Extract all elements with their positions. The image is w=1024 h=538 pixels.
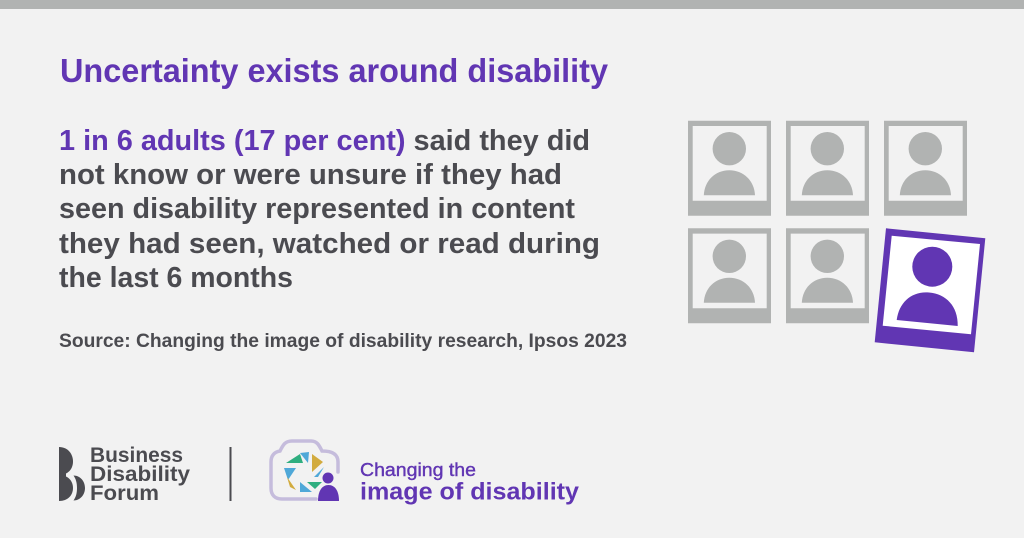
logo text: Changing the	[360, 460, 476, 480]
statistic text block: 1 in 6 adults (17 per cent) said they did	[59, 125, 590, 157]
logo mark	[59, 447, 85, 501]
camera outline icon	[271, 441, 338, 499]
highlighted purple photo	[875, 228, 985, 352]
Business Disability Forum logo	[59, 444, 190, 505]
statistic text block: not know or were unsure if they had	[59, 159, 562, 191]
statistic text block: seen disability represented in content	[59, 193, 575, 225]
top grey band	[0, 0, 1024, 9]
Changing the image of disability logo	[271, 441, 579, 506]
Changing the image of disability logo: image of disability	[360, 478, 579, 506]
statistic text block	[59, 125, 600, 294]
logo wordmark	[90, 444, 190, 505]
statistic text block: the last 6 months	[59, 262, 293, 294]
aperture segments	[284, 452, 324, 492]
logo wordmark: Business	[90, 444, 183, 467]
logo wordmark: Forum	[90, 482, 159, 505]
source note: Source: Changing the image of disability research, Ipsos 2023	[59, 331, 627, 352]
title: Uncertainty exists around disability	[60, 52, 609, 89]
person icon	[318, 472, 339, 501]
logo divider	[230, 447, 232, 501]
logo wordmark: Disability	[90, 463, 190, 486]
photo grid icon	[688, 121, 985, 352]
statistic text block: they had seen, watched or read during	[59, 228, 600, 260]
